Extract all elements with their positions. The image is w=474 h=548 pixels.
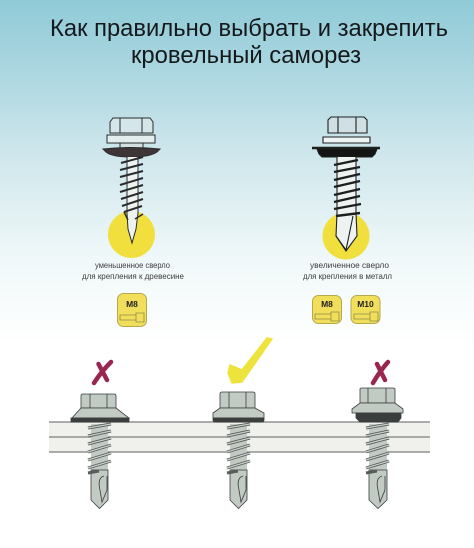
screw bottom: right, washer too thick — [352, 388, 403, 508]
screw bottom: left, washer too thin — [71, 394, 129, 508]
roof plates — [49, 422, 430, 452]
badge: M8 left — [118, 294, 146, 326]
badge: M10 — [351, 296, 380, 324]
background — [0, 0, 474, 345]
caption: right: увеличенное сверло — [310, 261, 390, 270]
badge: M8 left: M8 — [126, 299, 138, 309]
screw bottom: centre, correct washer — [213, 392, 264, 508]
caption: right: для крепления в металл — [303, 272, 392, 281]
caption: right — [303, 261, 392, 281]
title: кровельный саморез — [131, 42, 361, 69]
screw: enlarged drill for metal — [312, 117, 380, 251]
yellow circle: left drill — [108, 211, 155, 258]
badge: M8 right — [312, 296, 342, 324]
caption: left: для крепления к древесине — [82, 272, 185, 281]
screw: reduced drill for wood — [103, 118, 160, 243]
badge: M10: M10 — [357, 299, 374, 309]
mark: yellow check — [228, 338, 272, 383]
badge: M8 right: M8 — [321, 299, 333, 309]
yellow circle: right drill — [322, 212, 370, 260]
caption: left: уменьшенное сверло — [95, 261, 171, 270]
mark: red cross right — [373, 362, 388, 383]
caption: left — [82, 261, 185, 281]
title — [50, 15, 448, 69]
mark: red cross left — [94, 362, 111, 383]
title: Как правильно выбрать и закрепить — [50, 15, 448, 42]
